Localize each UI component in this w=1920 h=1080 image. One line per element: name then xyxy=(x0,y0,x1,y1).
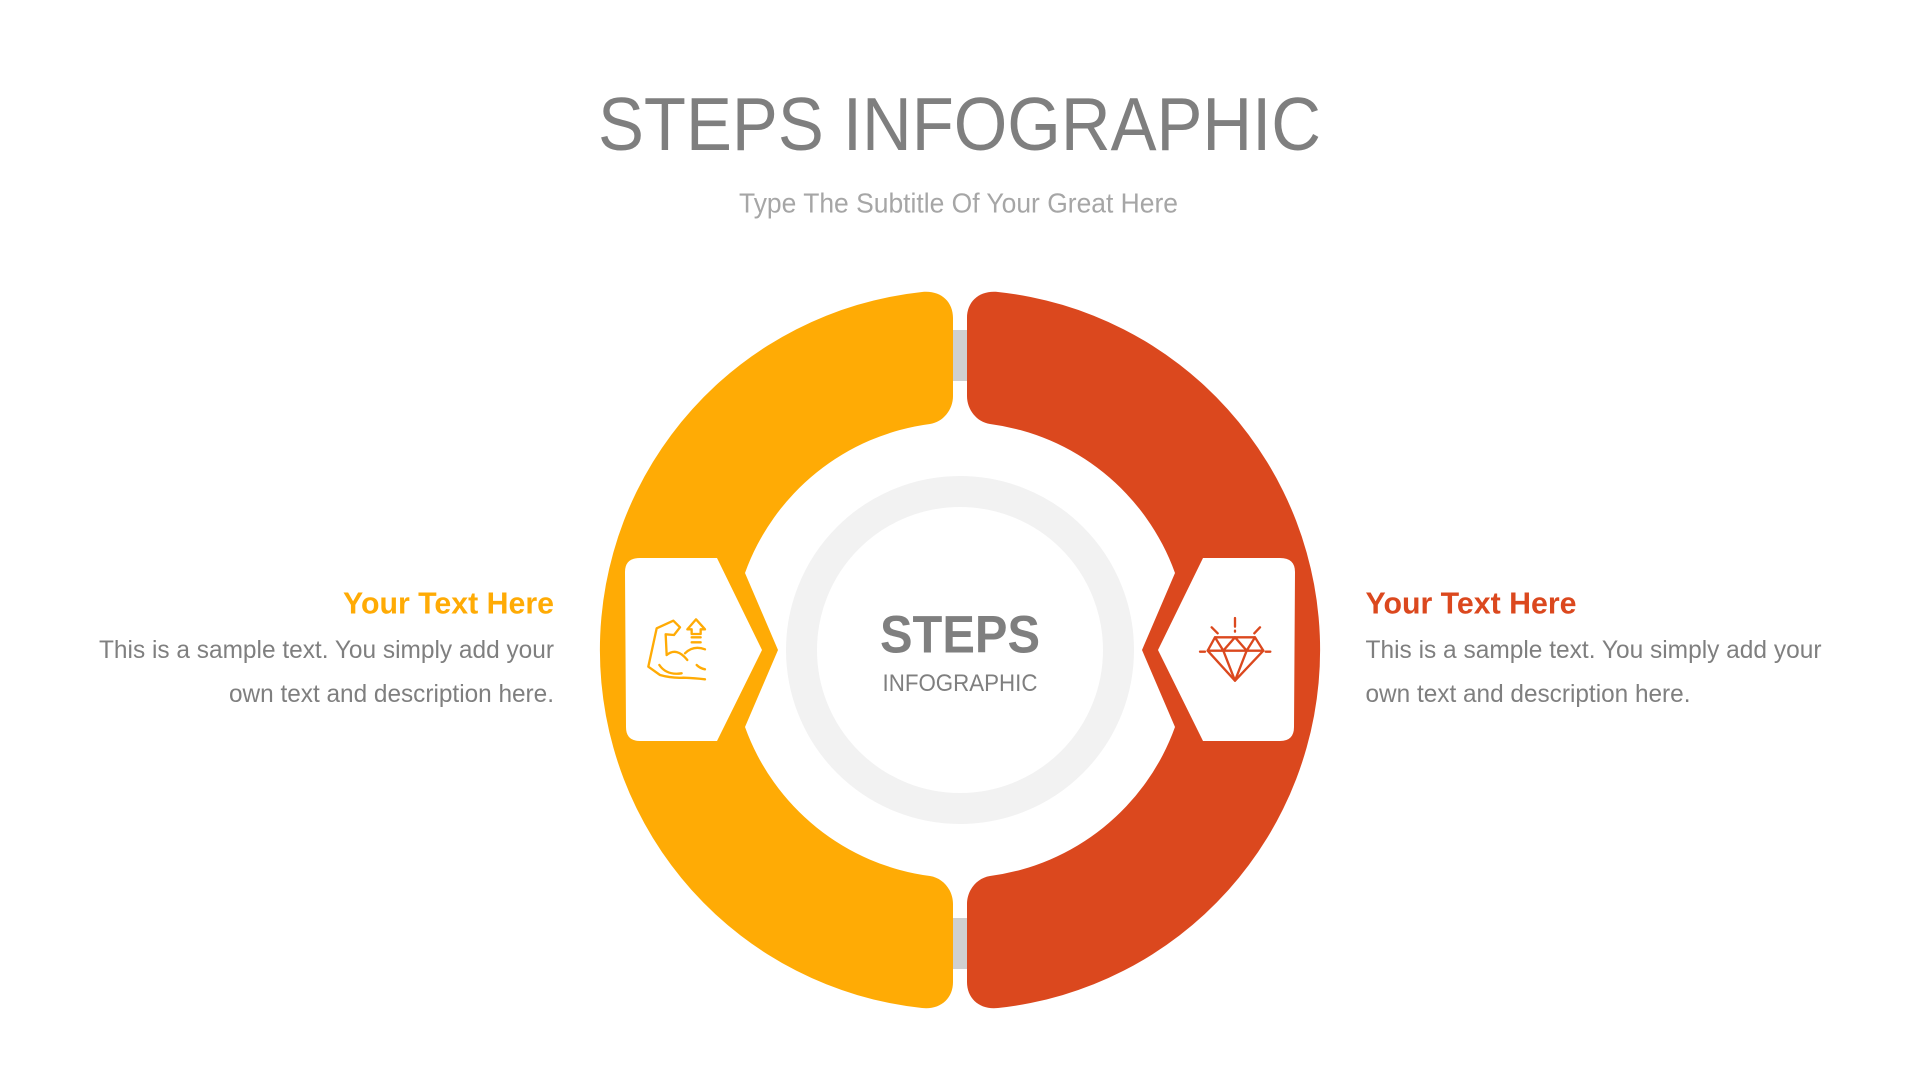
connector: top gray bar xyxy=(950,330,970,381)
center ring xyxy=(802,492,1118,808)
title: STEPS INFOGRAPHIC xyxy=(598,82,1321,166)
right heading: Your Text Here xyxy=(1366,586,1576,620)
panel: red half ring xyxy=(967,292,1320,1008)
left body line 2: own text and description here. xyxy=(229,680,554,708)
connector: bottom gray bar xyxy=(950,918,970,969)
left heading: Your Text Here xyxy=(343,586,554,620)
center subtitle: INFOGRAPHIC xyxy=(882,670,1038,697)
left body line 1: This is a sample text. You simply add your xyxy=(99,636,554,664)
icon: diamond with sparkle rays xyxy=(1200,618,1270,681)
center title: STEPS xyxy=(880,606,1040,664)
right body line 1: This is a sample text. You simply add your xyxy=(1366,636,1822,664)
panel: red icon badge xyxy=(1158,558,1295,741)
subtitle: Type The Subtitle Of Your Great Here xyxy=(739,188,1178,218)
right body line 2: own text and description here. xyxy=(1366,680,1690,708)
panel: yellow icon badge xyxy=(625,558,762,741)
text block: left xyxy=(99,586,554,708)
icon: flexed arm with up arrow xyxy=(648,619,705,679)
panel: yellow half ring xyxy=(600,292,953,1008)
text block: right xyxy=(1366,586,1822,708)
